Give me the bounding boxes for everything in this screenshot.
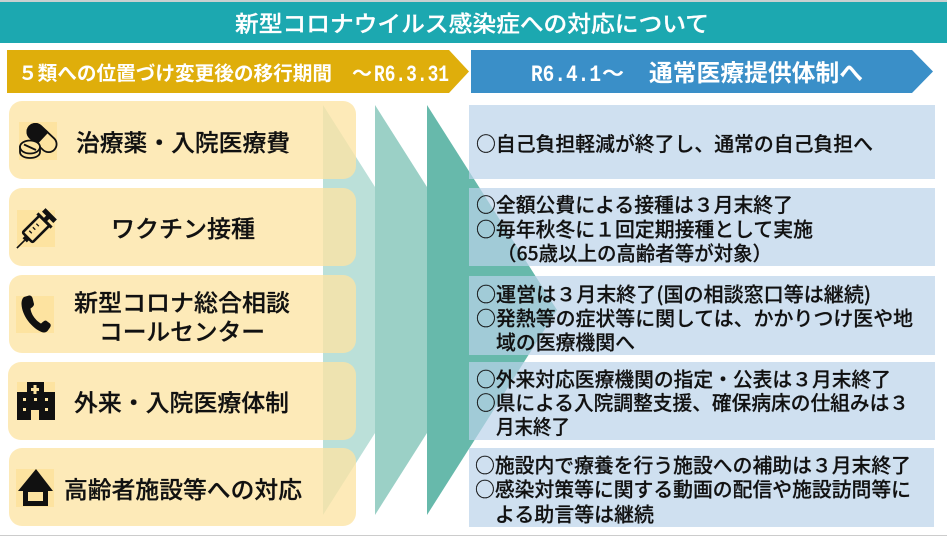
panel: call center outcome (469, 276, 935, 356)
arrow: regular care header: R6.4.1 (531, 62, 601, 88)
icon: pills (19, 121, 60, 160)
transition arrows (323, 105, 557, 515)
label: 治療薬・入院医療費 (76, 124, 290, 158)
arrow: transition period header: ～ (352, 57, 372, 86)
icon: house (16, 469, 54, 507)
arrow: regular care header (471, 50, 933, 93)
icon: hospital (17, 382, 55, 420)
title (0, 2, 947, 43)
arrow: regular care header: ～ (602, 57, 624, 86)
panel: vaccination outcome: （65歳以上の高齢者等が対象） (497, 238, 772, 266)
title: 新型コロナウイルス感染症への対応について (235, 7, 709, 39)
panel: medicine outcome: ○自己負担軽減が終了し、通常の自己負担へ (476, 128, 873, 157)
panel: consultation call center (9, 275, 356, 353)
panel: care system outcome (469, 362, 935, 440)
panel: call center outcome: 域の医療機関へ (496, 326, 635, 356)
label: 高齢者施設等への対応 (64, 471, 302, 505)
arrow: transition period header: ５類への位置づけ変更後の移行期間 (18, 57, 332, 86)
panel: consultation call center: コールセンター (99, 313, 265, 347)
panel: call center outcome: ○運営は３月末終了(国の相談窓口等は継続) (476, 278, 871, 308)
panel: medicine and hospital costs (9, 101, 356, 179)
label: 新型コロナ総合相談 (74, 284, 290, 318)
panel: vaccination (9, 188, 356, 266)
panel: elderly care facilities (9, 448, 356, 526)
panel: elderly care outcome: ○感染対策等に関する動画の配信や施設訪問等に (475, 474, 911, 502)
panel: elderly care outcome: ○施設内で療養を行う施設への補助は３月末終了 (475, 450, 911, 478)
panel: call center outcome: ○発熱等の症状等に関しては、かかりつけ医や地 (476, 302, 913, 332)
panel: medicine outcome (469, 105, 935, 179)
icon: telephone (16, 296, 54, 333)
label: 外来・入院医療体制 (74, 384, 289, 418)
panel: care system outcome: ○外来対応医療機関の指定・公表は３月末終了 (476, 364, 891, 392)
arrow: regular care header: 通常医療提供体制へ (649, 54, 863, 88)
panel: outpatient and inpatient care (8, 362, 356, 440)
panel: vaccination outcome: ○毎年秋冬に１回定期接種として実施 (476, 214, 813, 242)
panel: vaccination outcome: ○全額公費による接種は３月末終了 (476, 189, 793, 218)
panel: elderly care outcome (469, 448, 934, 528)
arrow: transition period header (7, 50, 469, 93)
icon: syringe (10, 208, 57, 255)
panel: care system outcome: ○県による入院調整支援、確保病床の仕組みは３ (476, 387, 909, 416)
panel: vaccination outcome (469, 188, 935, 266)
panel: care system outcome: 月末終了 (496, 411, 570, 440)
panel: elderly care outcome: よる助言等は継続 (495, 498, 654, 528)
label: ワクチン接種 (111, 210, 255, 244)
arrow: transition period header: R6.3.31 (374, 62, 449, 88)
